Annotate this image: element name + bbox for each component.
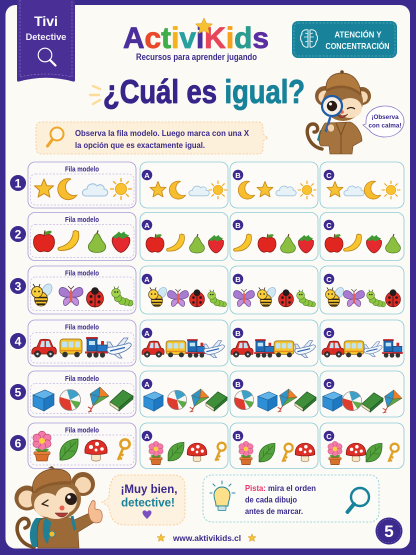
panel: row 3 option A: A bbox=[144, 275, 150, 284]
tagline: Recursos para aprender jugando bbox=[136, 52, 257, 62]
icon: flower bbox=[328, 441, 342, 465]
icon: kite bbox=[278, 389, 297, 412]
number badge 4: 4 bbox=[15, 334, 22, 348]
number badge 6: 6 bbox=[15, 436, 22, 450]
icon: pear bbox=[386, 234, 400, 253]
icon: pear bbox=[190, 234, 204, 253]
icon: thumb up hand bbox=[88, 501, 102, 523]
icon: brain bbox=[300, 30, 318, 47]
icon: strawberry bbox=[112, 232, 130, 252]
icon: flower bbox=[33, 431, 51, 461]
panel: row 3 option B bbox=[230, 266, 318, 314]
icon: heart bbox=[142, 510, 152, 519]
number badge 4 bbox=[10, 333, 26, 349]
page number bbox=[376, 518, 402, 544]
icon: detective hat bbox=[326, 73, 361, 94]
panel: row 1 option A bbox=[140, 162, 228, 208]
icon: banana bbox=[58, 230, 79, 251]
icon: butterfly bbox=[343, 289, 365, 306]
panel: row 2 option A bbox=[140, 212, 228, 260]
icon: butterfly bbox=[59, 286, 83, 306]
icon: bus bbox=[166, 341, 186, 357]
ribbon: Tivi Detective: Detective bbox=[26, 32, 66, 42]
icon: moon bbox=[364, 181, 381, 199]
icon: car bbox=[231, 341, 253, 357]
icon: star bbox=[34, 179, 54, 197]
panel: row 2 option C bbox=[320, 212, 404, 260]
panel: row 3 option C bbox=[320, 266, 404, 314]
panel: row 3 option B: B bbox=[235, 275, 241, 284]
speech bubble: muy bien detective: detective! bbox=[121, 498, 175, 510]
panel: row 5 option A: A bbox=[144, 380, 150, 389]
icon: kite bbox=[190, 389, 209, 412]
icon: banana bbox=[344, 234, 361, 251]
panel: row 2 option B: B bbox=[235, 221, 241, 230]
title rays bbox=[90, 86, 100, 104]
speech bubble: observa con calma: con calma! bbox=[369, 122, 401, 130]
panel: row 6 option C: C bbox=[326, 432, 332, 441]
icon: book bbox=[362, 393, 383, 412]
panel: row 3 option C: C bbox=[326, 275, 332, 284]
speech bubble: observa con calma bbox=[363, 106, 404, 137]
ribbon: Tivi Detective bbox=[17, 0, 75, 82]
icon: moon bbox=[169, 181, 186, 199]
panel: row 1 option B bbox=[230, 162, 318, 208]
panel: row 6 model bbox=[28, 423, 136, 468]
panel: row 6 option A bbox=[140, 423, 228, 468]
icon: cube bbox=[323, 392, 342, 411]
icon: star bbox=[248, 534, 256, 541]
icon: gold magnifier bbox=[48, 128, 64, 146]
icon: train bbox=[254, 339, 275, 358]
number badge 3: 3 bbox=[15, 280, 22, 294]
icon: moon bbox=[238, 181, 255, 199]
icon: ladybug bbox=[279, 289, 293, 307]
panel: row 5 model: Fila modelo bbox=[65, 376, 99, 383]
icon: star bbox=[157, 534, 165, 541]
panel: row 4 option B: B bbox=[235, 329, 241, 338]
icon: butterfly bbox=[167, 289, 189, 306]
hint box: de cada dibujo bbox=[245, 494, 297, 504]
icon: ladybug bbox=[190, 289, 204, 307]
icon: light bulb bbox=[210, 481, 235, 510]
icon: leaf bbox=[60, 439, 78, 460]
panel: row 4 option A bbox=[140, 320, 228, 366]
icon: strawberry bbox=[298, 235, 314, 253]
icon: banana bbox=[167, 234, 184, 251]
icon: cube bbox=[33, 390, 54, 411]
badge: Atención y concentración: ATENCIÓN Y bbox=[334, 28, 382, 40]
icon: star bbox=[327, 182, 343, 197]
icon: leaf bbox=[168, 442, 184, 461]
hint box bbox=[203, 475, 379, 522]
panel: row 6 option C bbox=[320, 423, 404, 468]
icon: cloud bbox=[344, 186, 364, 196]
icon: kite bbox=[88, 387, 109, 412]
panel: row 4 option C: C bbox=[326, 329, 332, 338]
icon: bus bbox=[274, 341, 294, 357]
panel: row 5 option C: C bbox=[326, 380, 332, 389]
icon: star bbox=[257, 182, 273, 197]
icon: car bbox=[32, 339, 56, 357]
icon: train bbox=[382, 339, 403, 358]
icon: ball bbox=[342, 391, 362, 411]
ribbon: Tivi Detective: Tivi bbox=[34, 13, 58, 29]
icon: plane bbox=[204, 341, 224, 358]
panel: row 1 option C bbox=[320, 162, 404, 208]
icon: sun bbox=[298, 181, 316, 199]
logo: ActiviKids bbox=[123, 22, 269, 55]
row 6 bbox=[10, 423, 404, 468]
panel: row 4 option C bbox=[320, 320, 404, 366]
icon: train bbox=[186, 339, 207, 358]
icon: train bbox=[85, 337, 108, 358]
icon: book bbox=[295, 392, 316, 411]
icon: cloud bbox=[276, 186, 296, 196]
icon: mushroom bbox=[85, 440, 107, 461]
icon: plane bbox=[107, 338, 131, 358]
icon: detective hat bbox=[33, 469, 71, 492]
icon: sun bbox=[110, 178, 132, 200]
panel: row 4 model bbox=[28, 320, 136, 366]
panel: row 2 model: Fila modelo bbox=[65, 217, 99, 224]
icon: plane bbox=[295, 341, 315, 358]
icon: mushroom bbox=[295, 443, 315, 462]
icon: bee bbox=[326, 286, 345, 307]
icon: caterpillar bbox=[208, 290, 227, 307]
icon: book bbox=[110, 390, 133, 411]
number badge 2: 2 bbox=[15, 228, 22, 242]
panel: row 2 option A: A bbox=[144, 221, 150, 230]
panel: row 4 option A: A bbox=[144, 329, 150, 338]
icon: cube bbox=[144, 392, 163, 411]
icon: bee bbox=[258, 286, 277, 307]
icon: pear bbox=[281, 234, 295, 253]
number badge 6 bbox=[10, 435, 26, 451]
footer website: www.aktivikids.cl bbox=[172, 533, 241, 543]
page number: 5 bbox=[384, 522, 394, 541]
icon: ladybug bbox=[86, 287, 104, 307]
number badge 5: 5 bbox=[15, 386, 22, 400]
panel: row 1 option C: C bbox=[326, 171, 332, 180]
panel: row 6 option B: B bbox=[235, 432, 241, 441]
panel: row 5 option B bbox=[230, 371, 318, 417]
icon: mushroom bbox=[187, 443, 207, 462]
icon: book bbox=[206, 392, 227, 411]
icon: apple bbox=[325, 234, 343, 252]
panel: row 3 option A bbox=[140, 266, 228, 314]
panel: row 3 model: Fila modelo bbox=[65, 270, 99, 278]
row 2 bbox=[10, 212, 404, 260]
icon: sun bbox=[382, 181, 400, 199]
icon: pear bbox=[88, 230, 106, 252]
row 5 bbox=[10, 371, 404, 417]
icon: cloud bbox=[82, 184, 108, 196]
icon: magnifier bbox=[38, 48, 56, 66]
icon: caterpillar bbox=[297, 290, 316, 307]
badge: Atención y concentración: CONCENTRACIÓN bbox=[326, 40, 390, 51]
mascot: monkey with magnifier bbox=[307, 70, 371, 154]
panel: row 5 option C bbox=[320, 371, 404, 417]
panel: row 4 model: Fila modelo bbox=[65, 324, 99, 332]
icon: flower bbox=[149, 441, 163, 465]
panel: row 3 model bbox=[28, 266, 136, 314]
hint box: antes de marcar. bbox=[245, 506, 303, 516]
icon: caterpillar bbox=[112, 286, 133, 306]
icon: cloud bbox=[189, 186, 209, 196]
hint box: Pista: mira el orden bbox=[245, 483, 316, 493]
panel: row 5 option B: B bbox=[235, 380, 241, 389]
icon: teal magnifier bbox=[348, 488, 369, 512]
panel: row 6 model: Fila modelo bbox=[65, 428, 99, 434]
icon: mushroom bbox=[346, 443, 366, 462]
icon: moon bbox=[58, 179, 77, 200]
number badge 1 bbox=[10, 175, 26, 191]
panel: row 1 model bbox=[28, 162, 136, 208]
icon: flower bbox=[239, 441, 253, 465]
number badge 1: 1 bbox=[15, 176, 22, 190]
icon: star bbox=[150, 182, 166, 197]
icon: plane bbox=[364, 342, 382, 357]
icon: apple bbox=[258, 234, 276, 252]
row 4 bbox=[10, 320, 404, 366]
icon: kite bbox=[383, 390, 402, 413]
icon: key bbox=[282, 444, 293, 462]
panel: row 5 model bbox=[28, 371, 136, 417]
icon: apple bbox=[146, 234, 164, 252]
speech bubble: observa con calma: ¡Observa bbox=[371, 114, 399, 121]
speech bubble: muy bien detective: ¡Muy bien, bbox=[121, 484, 177, 496]
icon: ball bbox=[234, 390, 254, 410]
panel: row 4 option B bbox=[230, 320, 318, 366]
icon: blue magnifier bbox=[326, 118, 330, 131]
icon: ball bbox=[167, 390, 187, 410]
number badge 2 bbox=[10, 226, 26, 242]
panel: row 6 option B bbox=[230, 423, 318, 468]
icon: key bbox=[118, 439, 130, 460]
panel: row 2 option C: C bbox=[326, 221, 332, 230]
icon: car bbox=[142, 341, 164, 357]
speech bubble: muy bien detective bbox=[102, 475, 185, 525]
icon: key bbox=[215, 443, 226, 461]
icon: bus bbox=[60, 339, 82, 357]
icon: bee bbox=[149, 286, 168, 307]
icon: cube bbox=[258, 392, 277, 411]
icon: caterpillar bbox=[367, 290, 386, 307]
panel: row 1 model: Fila modelo bbox=[65, 166, 99, 174]
icon: ball bbox=[60, 390, 80, 410]
panel: row 5 option A bbox=[140, 371, 228, 417]
mascot: monkey thumbs up bbox=[14, 466, 102, 548]
icon: leaf bbox=[366, 443, 382, 462]
icon: strawberry bbox=[208, 235, 224, 253]
title: ¿Cuál es igual? bbox=[103, 73, 305, 110]
panel: row 1 option B: B bbox=[235, 171, 241, 180]
footer website bbox=[157, 533, 256, 543]
instruction box: la opción que es exactamente igual. bbox=[75, 140, 205, 150]
panel: row 2 option B bbox=[230, 212, 318, 260]
icon: apple bbox=[34, 230, 54, 252]
panel: row 2 model bbox=[28, 212, 136, 260]
icon: banana bbox=[234, 234, 251, 251]
icon: ladybug bbox=[386, 289, 400, 307]
row 1 bbox=[10, 162, 404, 208]
icon: bus bbox=[344, 341, 364, 357]
badge: Atención y concentración bbox=[292, 21, 397, 58]
number badge 5 bbox=[10, 384, 26, 400]
row 3 bbox=[10, 266, 404, 314]
instruction box bbox=[36, 122, 268, 154]
number badge 3 bbox=[10, 278, 26, 294]
icon: key bbox=[388, 444, 399, 462]
icon: leaf bbox=[259, 443, 275, 462]
icon: sun bbox=[209, 181, 227, 199]
icon: car bbox=[322, 341, 344, 357]
icon: strawberry bbox=[366, 235, 382, 253]
icon: bee bbox=[32, 282, 54, 306]
instruction box: Observa la fila modelo. Luego marca con una X bbox=[75, 128, 249, 138]
panel: row 1 option A: A bbox=[144, 171, 150, 180]
icon: butterfly bbox=[233, 289, 255, 306]
panel: row 6 option A: A bbox=[144, 432, 150, 441]
icon: logo star bbox=[196, 18, 212, 34]
